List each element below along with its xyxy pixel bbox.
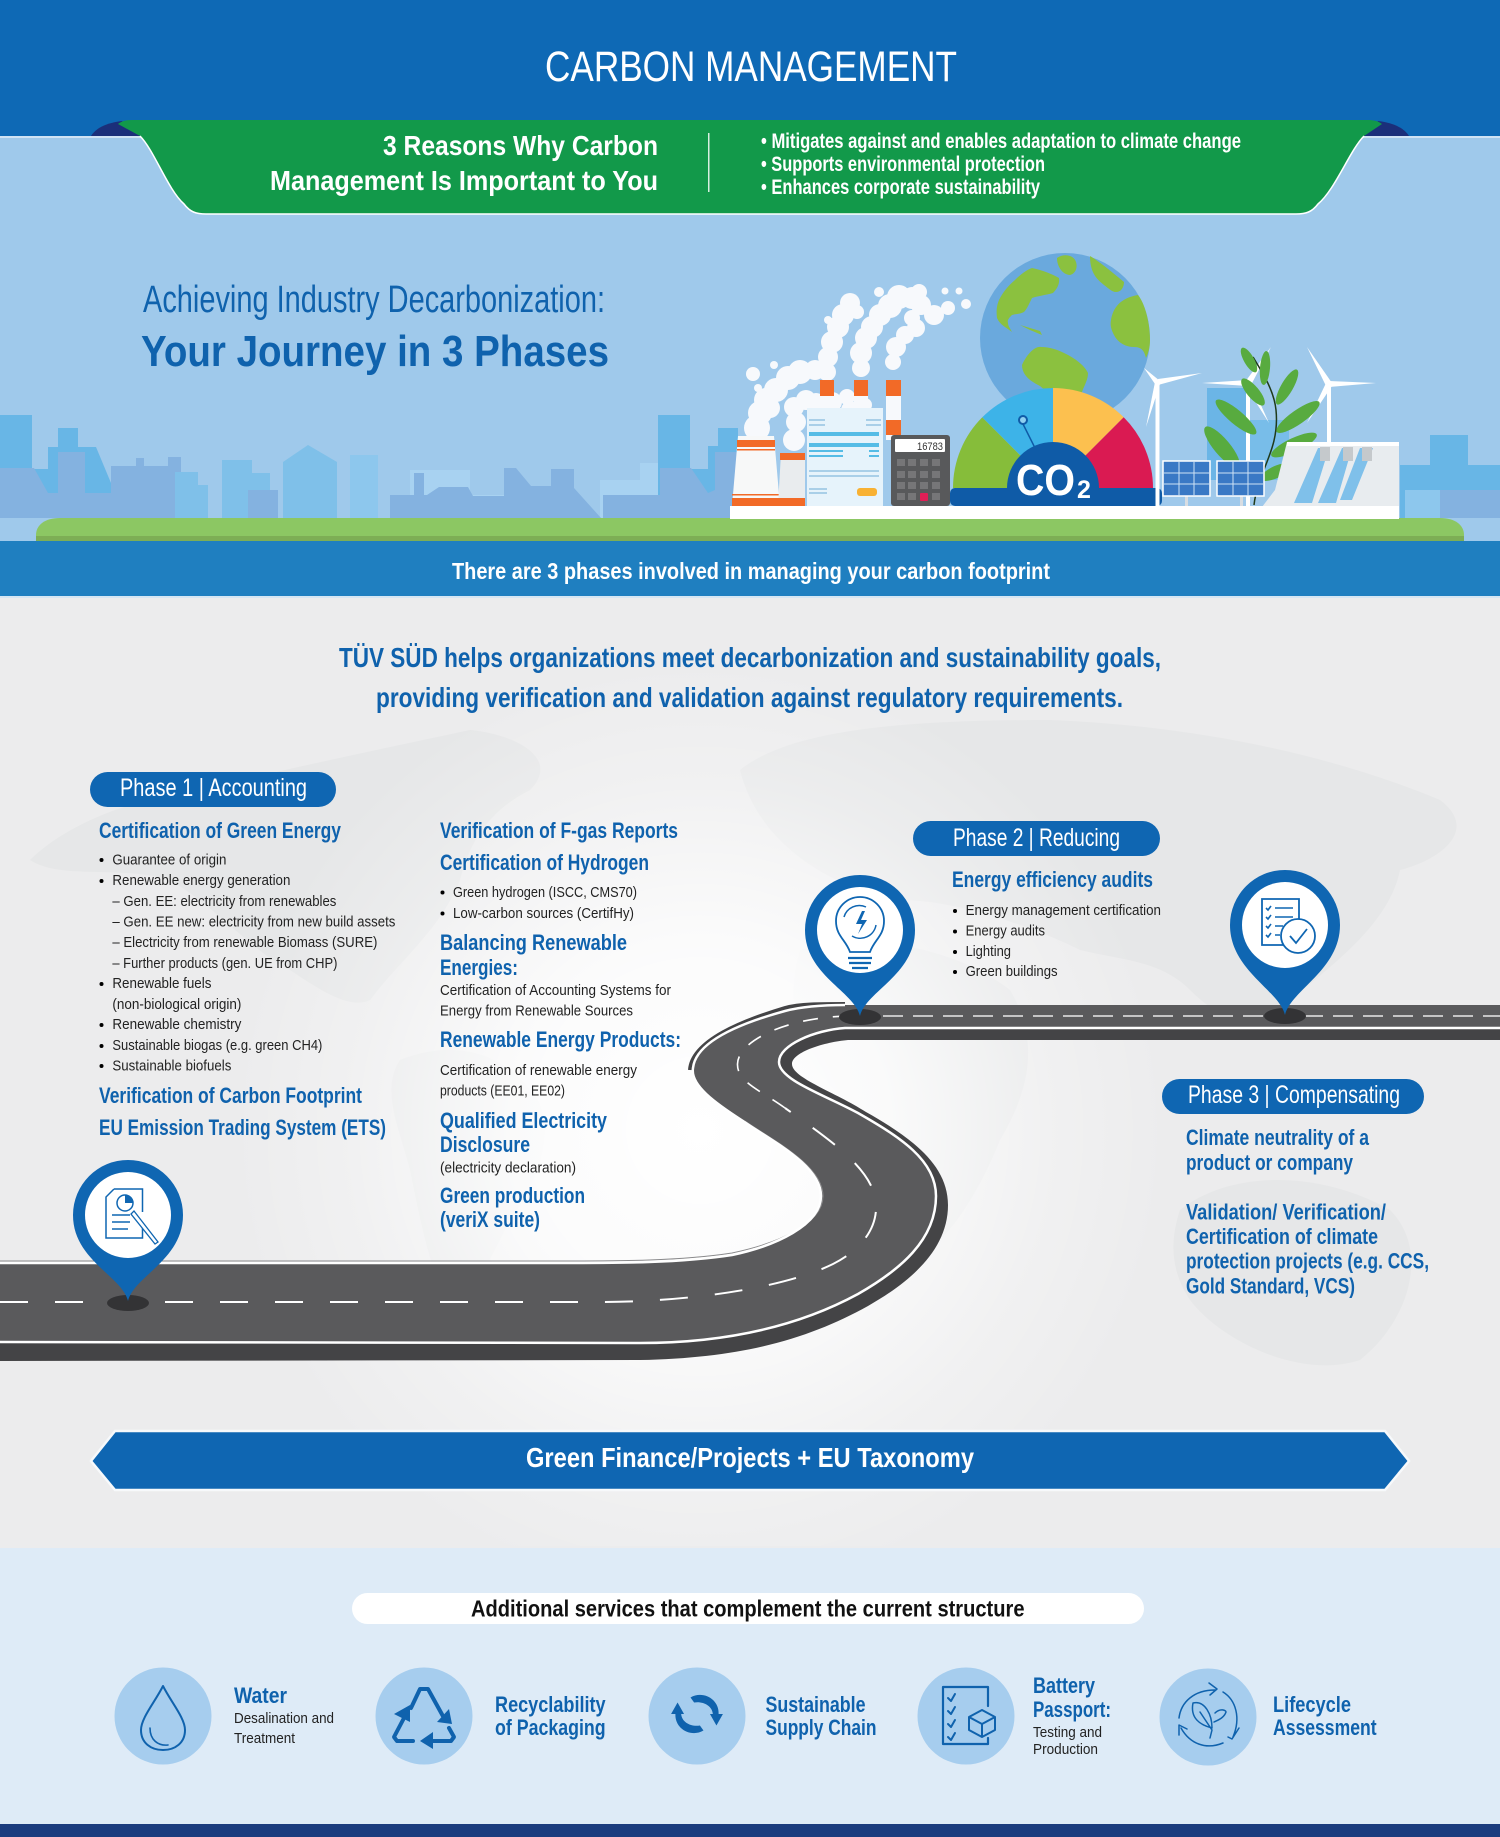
white base platform	[730, 506, 1399, 519]
column 2 list: (electricity declaration)	[440, 1160, 576, 1177]
banner bullet list	[761, 130, 1241, 199]
service: battery passport: Testing and	[1033, 1724, 1102, 1741]
header band	[0, 0, 1500, 138]
column 1 list: Certification of Green Energy	[99, 818, 342, 843]
smoke	[744, 284, 971, 451]
panel: journey background	[0, 598, 1500, 1548]
wind turbines	[1144, 347, 1376, 506]
column 1 list: – Further products (gen. UE from CHP)	[112, 955, 337, 972]
world map watermark	[30, 720, 1457, 1365]
illustration: factory, CO2 gauge, renewables	[730, 253, 1399, 519]
banner bullet list: • Mitigates against and enables adaptation to climate change	[761, 130, 1241, 153]
column 1 list: Sustainable biogas (e.g. green CH4)	[112, 1037, 322, 1054]
icon: globe	[980, 253, 1150, 423]
service: water: Water	[234, 1683, 287, 1708]
phase 2 list: Energy audits	[966, 922, 1045, 940]
column 2 list: Energies:	[440, 955, 518, 980]
service: battery passport: Battery	[1033, 1673, 1096, 1698]
center glow	[0, 600, 1500, 1546]
heading: journey	[141, 279, 609, 376]
service: battery passport	[918, 1668, 1111, 1764]
phase 2 list: Lighting	[966, 943, 1011, 960]
panel: 3 reasons green banner	[91, 120, 1409, 214]
pin: phase 2 end checklist icon	[1230, 870, 1340, 1024]
service: lifecycle assessment: Lifecycle	[1273, 1692, 1351, 1717]
heading: journey: Achieving Industry Decarbonization:	[143, 279, 605, 321]
service: recyclability: Recyclability	[495, 1692, 606, 1717]
service: sustainable supply chain: Sustainable	[766, 1692, 866, 1717]
services heading: Additional services that complement the current structure	[471, 1596, 1024, 1622]
phase 1 pill: Phase 1 | Accounting	[120, 774, 307, 802]
road	[0, 1004, 1500, 1361]
column 1 list: Sustainable biofuels	[112, 1058, 231, 1075]
column 1 list: Renewable energy generation	[112, 872, 290, 889]
phase 3 text: Certification of climate	[1186, 1224, 1378, 1249]
document	[807, 408, 883, 507]
column 2 list: Certification of renewable energy	[440, 1062, 637, 1079]
CO2 gauge: CO	[1016, 456, 1075, 505]
service: battery passport: Passport:	[1033, 1697, 1111, 1722]
services heading	[352, 1593, 1144, 1624]
column 2 list	[440, 818, 681, 1232]
column 1 list: Verification of Carbon Footprint	[99, 1083, 363, 1108]
background building	[1207, 388, 1249, 480]
service: lifecycle assessment: Assessment	[1273, 1715, 1377, 1740]
banner heading: Management Is Important to You	[270, 165, 658, 196]
column 1 list: (non-biological origin)	[112, 996, 241, 1013]
phase 3 text	[1186, 1125, 1429, 1298]
phase 3 text: Validation/ Verification/	[1186, 1200, 1386, 1225]
column 2 list: Balancing Renewable	[440, 930, 627, 955]
column 1 list: – Gen. EE new: electricity from new build assets	[112, 914, 395, 930]
CO2 gauge: 2	[1077, 476, 1091, 504]
service: battery passport: Production	[1033, 1741, 1098, 1758]
heading: journey: Your Journey in 3 Phases	[141, 327, 609, 376]
city skyline	[0, 415, 1500, 518]
CO2 gauge	[950, 388, 1162, 506]
cooling towers	[732, 436, 805, 506]
column 1 list: – Gen. EE: electricity from renewables	[112, 893, 336, 910]
calculator	[891, 435, 950, 506]
service: recyclability: of Packaging	[495, 1715, 606, 1740]
phase 3 text: protection projects (e.g. CCS,	[1186, 1249, 1429, 1274]
ribbon: green finance: Green Finance/Projects + EU Taxonomy	[526, 1442, 974, 1473]
panel: phase 1 accounting	[73, 772, 681, 1311]
chimneys	[820, 380, 901, 440]
service: water: Treatment	[234, 1730, 296, 1747]
panel: phase 3 compensating	[1162, 1079, 1429, 1298]
column 2 list: Disclosure	[440, 1132, 530, 1157]
column 2 list: Qualified Electricity	[440, 1108, 608, 1133]
phase 3 pill	[1162, 1079, 1424, 1114]
phase 2 pill	[913, 821, 1160, 856]
phase 2 list: Energy efficiency audits	[952, 867, 1153, 892]
plant	[1199, 345, 1323, 505]
phase 2 list: Green buildings	[966, 963, 1058, 980]
phase 2 list	[952, 867, 1161, 980]
service: lifecycle assessment	[1160, 1668, 1377, 1766]
phase 3 text: product or company	[1186, 1150, 1354, 1175]
title: CARBON MANAGEMENT	[545, 43, 957, 91]
column 2 list: (veriX suite)	[440, 1207, 540, 1232]
column 2 list: Certification of Hydrogen	[440, 850, 649, 875]
green ground strip	[36, 518, 1464, 541]
phase 3 text: Gold Standard, VCS)	[1186, 1274, 1355, 1298]
band text: There are 3 phases involved in managing your carbon footprint	[452, 558, 1050, 584]
pin: phase 1 report icon	[73, 1160, 183, 1311]
phase 1 pill	[90, 772, 336, 807]
phase band	[0, 541, 1500, 598]
column 1 list: EU Emission Trading System (ETS)	[99, 1115, 386, 1140]
column 2 list: Green hydrogen (ISCC, CMS70)	[453, 884, 637, 901]
column 2 list: Verification of F-gas Reports	[440, 818, 678, 843]
sky background	[0, 136, 1500, 541]
banner bullet list: • Enhances corporate sustainability	[761, 176, 1040, 199]
column 2 list: Low-carbon sources (CertifHy)	[453, 905, 634, 922]
banner heading	[270, 130, 658, 196]
dam	[1262, 442, 1399, 507]
column 2 list: Certification of Accounting Systems for	[440, 982, 671, 999]
column 2 list: Energy from Renewable Sources	[440, 1002, 633, 1020]
service: water	[114, 1668, 334, 1764]
column 2 list: Green production	[440, 1183, 585, 1208]
banner bullet list: • Supports environmental protection	[761, 153, 1045, 176]
column 1 list: – Electricity from renewable Biomass (SURE)	[112, 934, 377, 951]
banner heading: 3 Reasons Why Carbon	[383, 130, 658, 161]
ribbon: green finance	[91, 1431, 1409, 1490]
intro statement	[339, 642, 1161, 713]
service: sustainable supply chain	[648, 1668, 876, 1764]
phase 2 list: Energy management certification	[966, 902, 1161, 919]
solar panels	[1163, 461, 1264, 507]
column 1 list	[99, 818, 395, 1140]
intro statement: TÜV SÜD helps organizations meet decarbonization and sustainability goals,	[339, 642, 1161, 673]
service: water: Desalination and	[234, 1710, 334, 1727]
service: recyclability	[376, 1668, 606, 1764]
pin: phase 2 light bulb icon	[805, 875, 915, 1025]
phase 2 pill: Phase 2 | Reducing	[953, 824, 1120, 852]
service: sustainable supply chain: Supply Chain	[766, 1715, 876, 1740]
column 1 list: Guarantee of origin	[112, 852, 226, 868]
phase 3 text: Climate neutrality of a	[1186, 1125, 1370, 1150]
calculator: 16783	[917, 441, 943, 453]
column 2 list: products (EE01, EE02)	[440, 1082, 565, 1100]
intro statement: providing verification and validation against regulatory requirements.	[376, 682, 1123, 713]
column 1 list: Renewable chemistry	[112, 1016, 242, 1033]
column 2 list: Renewable Energy Products:	[440, 1027, 681, 1052]
column 1 list: Renewable fuels	[112, 975, 211, 992]
panel: phase 2 reducing	[805, 821, 1340, 1025]
phase 3 pill: Phase 3 | Compensating	[1188, 1081, 1400, 1109]
panel: additional services	[0, 1548, 1500, 1837]
